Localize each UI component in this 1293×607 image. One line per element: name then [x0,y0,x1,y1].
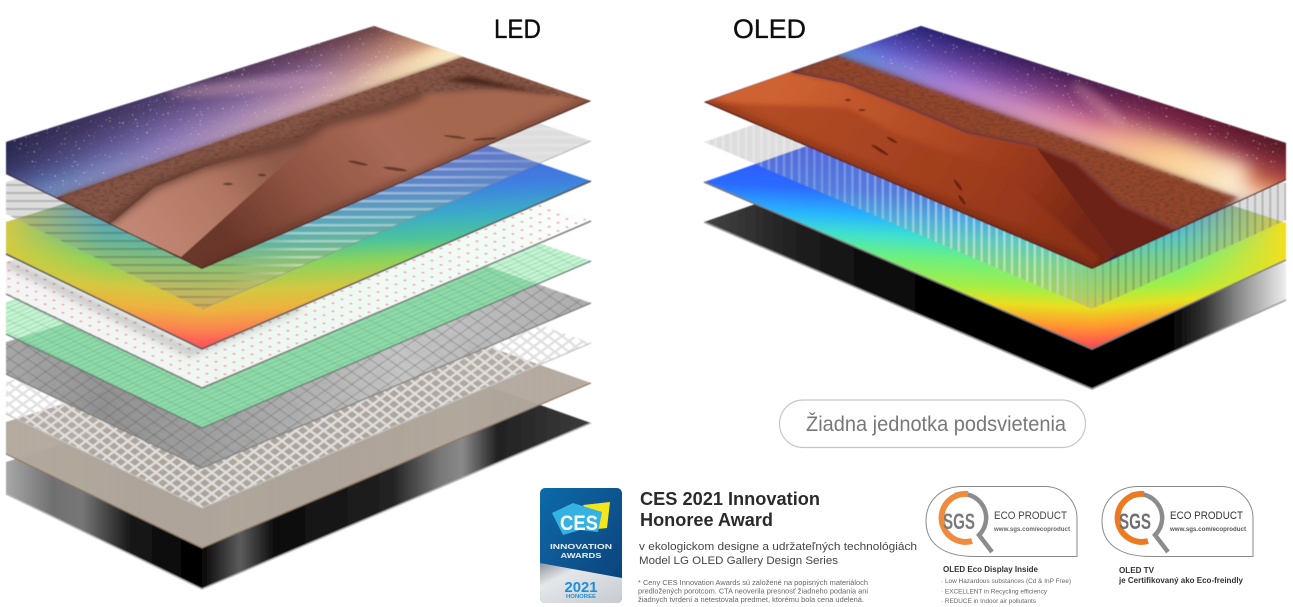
layer: green grid film [5,243,592,429]
text block: award description [639,541,917,567]
icon: CES innovation awards badge: INNOVATION [550,542,612,551]
text block: award footnote: predložených porotcom. CTA neoverila presnosť žiadneho podania ani [638,588,868,596]
layer: black back cover [6,346,591,589]
layer: black back panel [704,146,1286,389]
text block: award footnote [638,580,868,604]
icon: SGS eco product label 2 [1102,486,1253,556]
layer: desert screen image [704,25,1287,270]
callout: no backlight unit pill [780,400,1086,448]
text block: award description: v ekologickom designe a udržateľných technológiách [639,541,917,553]
text block: OLED TV eco-friendly certification: je Certifikovaný ako Eco-freindly [1118,576,1244,585]
panel: LED layer stack [0,0,600,589]
text block: OLED eco display details [941,564,1071,605]
layer: tan reflector sheet [6,306,591,548]
icon: CES innovation awards badge: HONOREE [566,594,597,600]
text block: CES award title: Honoree Award [640,510,773,530]
icon: SGS eco product label 2: SGS [1119,509,1151,534]
layer: RGB colour gradient panel [6,106,591,349]
text block: CES award title [640,489,820,530]
icon: CES innovation awards badge [540,488,622,603]
layer: grey diffuser grid [6,226,591,468]
panel: OLED layer stack [700,0,1293,389]
text block: OLED eco display details: · REDUCE in Indoor air pollutants [941,598,1037,605]
icon: CES innovation awards badge: CES [560,512,598,535]
icon: SGS eco product label 1: ECO PRODUCT [994,510,1067,522]
icon: CES innovation awards badge: 2021 [564,579,598,596]
text block: award footnote: * Ceny CES Innovation Awards sú založené na popisných materiáloch [638,580,868,587]
text block: award description: Model LG OLED Gallery Design Series [639,555,839,567]
icon: SGS eco product label 2: ECO PRODUCT [1170,510,1243,522]
layer: RGB colour gradient panel [704,106,1286,349]
text block: award footnote: žiadnych tvrdení a netestovala predmet, ktorému bola cena udelená. [638,597,864,604]
text block: OLED TV eco-friendly certification: OLED TV [1119,566,1155,575]
layer: striped polarizer film [704,124,1286,310]
heading: OLED: OLED [733,14,806,44]
icon: SGS eco product label 1: www.sgs.com/ecoproduct [993,527,1070,533]
heading: LED: LED [494,14,541,44]
layer: white lattice sheet [6,266,591,508]
text block: CES award title: CES 2021 Innovation [640,489,820,509]
callout: no backlight unit pill: Žiadna jednotka podsvietenia [806,411,1066,436]
text block: OLED TV eco-friendly certification [1118,566,1244,585]
icon: SGS eco product label 1: SGS [943,509,975,534]
layer: white film with red dots [5,203,592,390]
layer: striped polarizer film [6,124,592,310]
icon: SGS eco product label 2: www.sgs.com/ecoproduct [1169,527,1246,533]
text block: OLED eco display details: · Low Hazardous substances (Cd & InP Free) [941,578,1071,585]
icon: SGS eco product label 1 [926,486,1077,556]
text block: OLED eco display details: · EXCELLENT in Recycling efficiency [941,588,1048,596]
layer: desert screen image [5,25,592,270]
text block: OLED eco display details: OLED Eco Display Inside [943,564,1038,574]
icon: CES innovation awards badge: AWARDS [560,551,602,560]
